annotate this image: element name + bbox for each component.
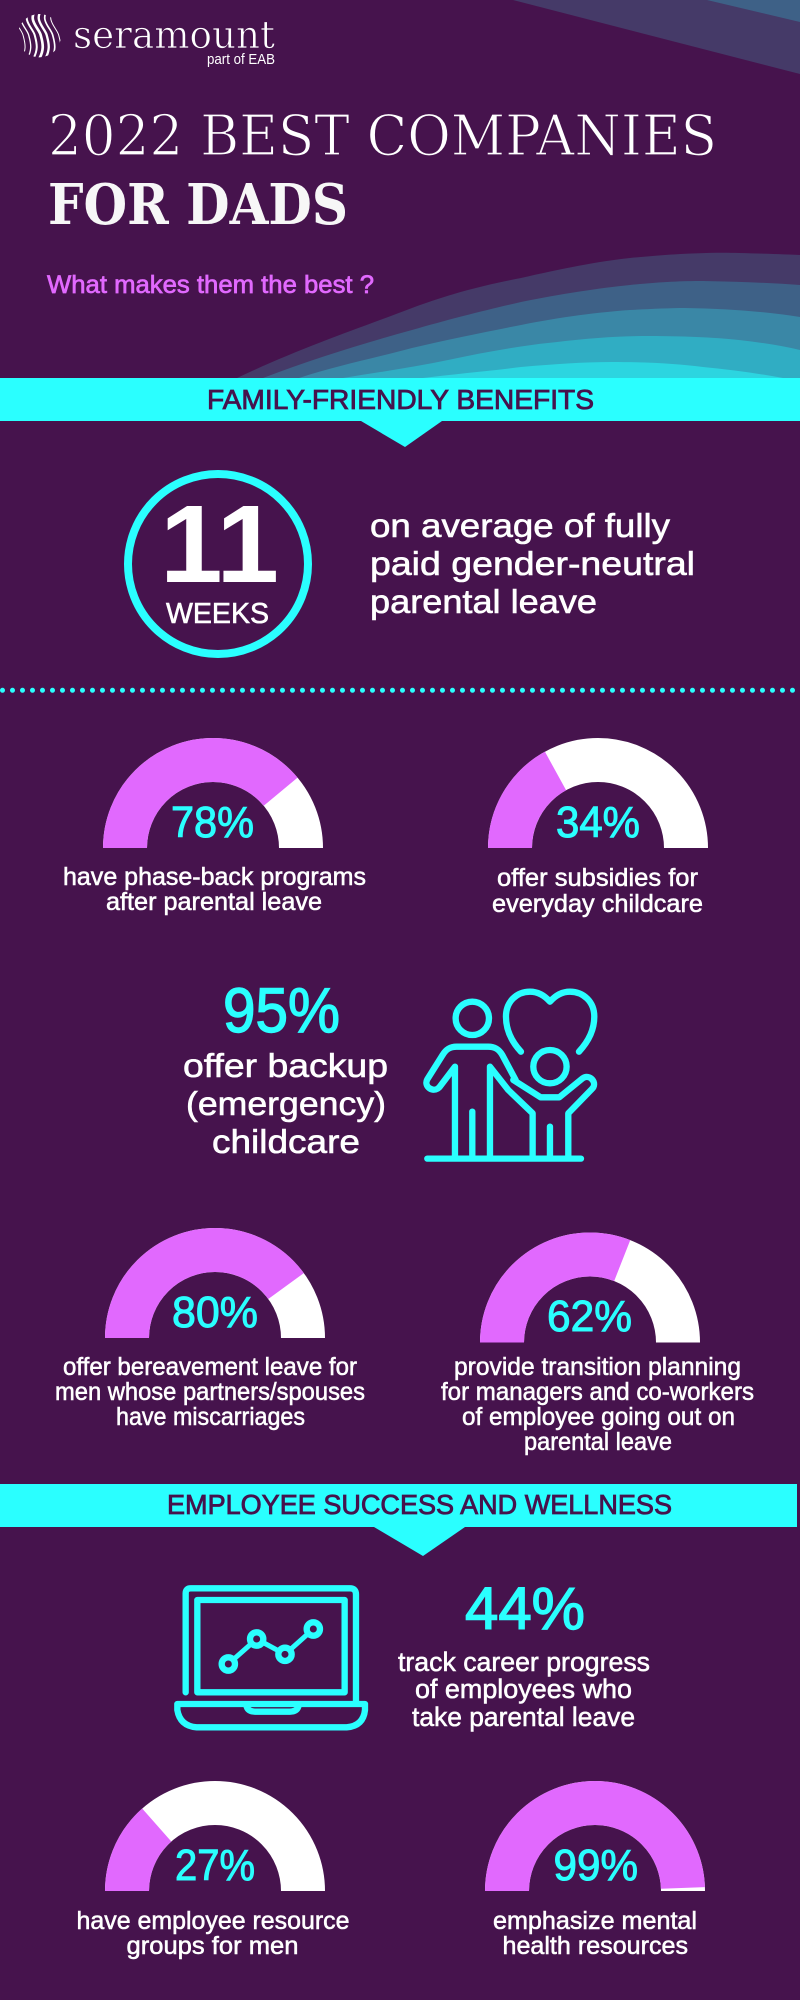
gauge: 80% bereavement leave <box>55 1250 365 1431</box>
text: parental leave description: paid gender-neutral <box>370 546 695 583</box>
gauge: 62% transition planning: for managers and co-workers <box>441 1378 754 1406</box>
gauge: 34% childcare subsidies: everyday childcare <box>492 890 703 918</box>
section banner: employee success and wellness <box>0 1484 797 1556</box>
title <box>48 104 717 238</box>
gauge: 78% phase-back programs: 78% <box>171 798 254 847</box>
stat: 44% career progress <box>398 1576 650 1732</box>
text: parental leave description <box>370 508 695 621</box>
icon: parent and child with heart <box>426 992 594 1159</box>
stat: 44% career progress: track career progress <box>398 1647 650 1677</box>
gauge: 80% bereavement leave: have miscarriages <box>116 1403 305 1431</box>
gauge: 27% employee resource groups: have employee resource <box>76 1907 350 1935</box>
icon: wave globe <box>19 14 60 58</box>
gauge: 62% transition planning: parental leave <box>524 1428 672 1456</box>
gauge: 34% childcare subsidies: offer subsidies for <box>497 864 698 892</box>
section banner: family-friendly benefits <box>0 378 800 447</box>
gauge: 80% bereavement leave: 80% <box>172 1288 258 1337</box>
icon: laptop with line chart <box>177 1588 365 1727</box>
logo: seramount <box>19 14 274 67</box>
gauge: 78% phase-back programs <box>63 760 366 916</box>
decorative waves above banner <box>237 253 800 378</box>
text: parental leave description: on average of fully <box>370 508 670 545</box>
wordmark: seramount <box>73 13 275 57</box>
gauge: 34% childcare subsidies <box>492 760 703 918</box>
title: FOR DADS <box>48 172 348 238</box>
stat: 95% backup childcare: 95% <box>223 976 340 1046</box>
gauge: 62% transition planning: provide transition planning <box>454 1353 741 1381</box>
gauge: 80% bereavement leave: men whose partners/spouses <box>55 1378 365 1406</box>
gauge: 99% mental health resources: health resources <box>502 1932 688 1960</box>
stat: 11 weeks circle: WEEKS <box>166 598 269 630</box>
gauge: 62% transition planning <box>441 1254 754 1456</box>
stat: 44% career progress: take parental leave <box>412 1702 635 1732</box>
stat: 95% backup childcare: (emergency) <box>186 1086 386 1123</box>
gauge: 62% transition planning: 62% <box>547 1292 632 1341</box>
subtitle: What makes them the best ? <box>47 271 374 299</box>
stat: 95% backup childcare: offer backup <box>183 1048 388 1085</box>
gauge: 62% transition planning: of employee going out on <box>462 1403 735 1431</box>
section banner: family-friendly benefits: FAMILY-FRIENDLY BENEFITS <box>207 384 594 415</box>
gauge: 27% employee resource groups: groups for men <box>126 1932 298 1960</box>
tagline: part of EAB <box>207 51 275 68</box>
gauge: 99% mental health resources <box>493 1803 697 1960</box>
gauge: 27% employee resource groups: 27% <box>175 1841 255 1890</box>
title: 2022 BEST COMPANIES <box>48 104 717 169</box>
stat: 44% career progress: 44% <box>465 1576 585 1642</box>
stat: 95% backup childcare: childcare <box>212 1124 360 1161</box>
gauge: 99% mental health resources: 99% <box>554 1841 638 1890</box>
gauge: 78% phase-back programs: have phase-back programs <box>63 863 366 891</box>
gauge: 27% employee resource groups <box>76 1803 350 1960</box>
gauge: 78% phase-back programs: after parental leave <box>106 888 322 916</box>
stat: 11 weeks circle <box>128 474 308 654</box>
section banner: employee success and wellness: EMPLOYEE SUCCESS AND WELLNESS <box>167 1489 672 1520</box>
stat: 95% backup childcare <box>183 976 388 1161</box>
stat: 44% career progress: of employees who <box>415 1674 632 1704</box>
gauge: 34% childcare subsidies: 34% <box>556 798 640 847</box>
text: parental leave description: parental leave <box>370 584 597 621</box>
stat: 11 weeks circle: 11 <box>160 483 279 606</box>
gauge: 99% mental health resources: emphasize mental <box>493 1907 697 1935</box>
decorative waves top right <box>513 0 800 74</box>
gauge: 80% bereavement leave: offer bereavement leave for <box>63 1353 357 1381</box>
